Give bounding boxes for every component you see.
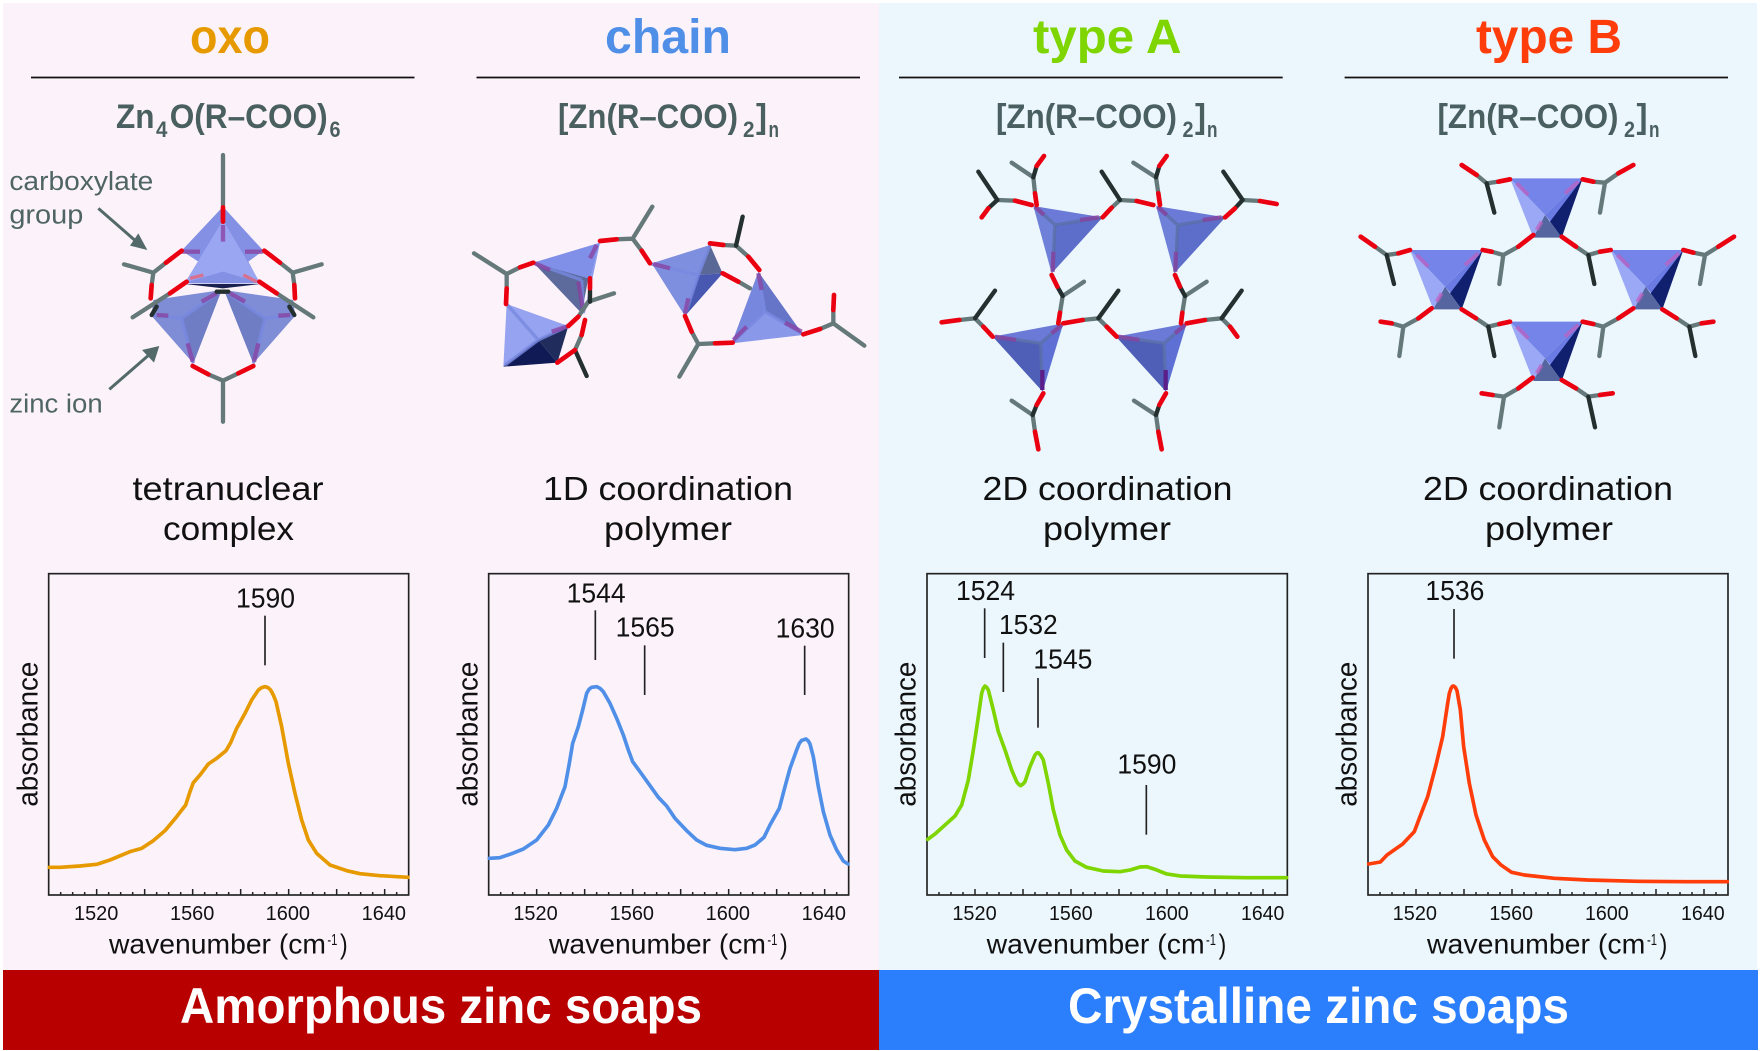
tetrahedra: top	[152, 207, 295, 363]
description: type A: polymer	[1043, 511, 1171, 548]
column: type A	[891, 11, 1287, 959]
formula: oxo: 6	[330, 117, 340, 142]
y axis title: absorbance	[453, 662, 485, 807]
formula: oxo: 4	[156, 117, 168, 142]
x axis numbers: 1520	[74, 902, 118, 925]
description: chain: polymer	[604, 511, 732, 548]
x axis title: )	[340, 928, 348, 959]
peak label 1524	[956, 575, 1015, 658]
molecule: tetranuclear complex with annotations	[9, 155, 322, 422]
description: type A: 2D coordination	[982, 471, 1232, 508]
x axis numbers: 1560	[610, 902, 654, 925]
description: chain: 1D coordination	[543, 471, 793, 508]
peak label 1532: 1532	[999, 609, 1058, 640]
molecule: 2D layer type B	[1361, 165, 1734, 427]
description: type B: 2D coordination	[1423, 471, 1673, 508]
background: crystalline panel	[879, 3, 1757, 970]
x axis title: wavenumber (cm	[108, 928, 326, 959]
peak label 1524: 1524	[956, 575, 1015, 606]
arrow: zinc ion	[109, 346, 159, 389]
curve	[1369, 686, 1727, 882]
peak label 1544: 1544	[567, 577, 626, 608]
x axis title: )	[1219, 928, 1226, 959]
callout: carboxylate group: carboxylate	[9, 166, 153, 196]
y axis title: absorbance	[13, 662, 45, 807]
heading: chain: chain	[605, 11, 731, 64]
peak label 1565	[616, 612, 675, 695]
x axis title: -1	[767, 932, 777, 949]
banner: amorphous zinc soaps	[3, 970, 879, 1050]
formula: oxo: Zn	[116, 98, 154, 136]
banner: crystalline zinc soaps	[879, 970, 1758, 1050]
x axis title: )	[1660, 928, 1667, 959]
x axis numbers: 1520	[513, 902, 558, 925]
peak label 1532	[999, 609, 1058, 692]
formula: type B: 2	[1624, 117, 1635, 142]
callout: carboxylate group	[9, 166, 153, 229]
x axis title: wavenumber (cm	[986, 928, 1205, 959]
peak label 1544	[567, 577, 626, 660]
tetrahedra	[1410, 178, 1683, 381]
description: type B	[1423, 471, 1673, 548]
formula: chain: n	[768, 117, 779, 142]
formula: chain: 2	[743, 117, 754, 142]
x axis numbers: 1520	[1393, 902, 1437, 925]
x axis title: )	[780, 928, 788, 959]
bonds	[1361, 165, 1734, 427]
description: oxo	[132, 471, 324, 548]
heading: oxo: oxo	[190, 11, 270, 64]
banner: amorphous zinc soaps: Amorphous zinc soaps	[180, 978, 702, 1034]
background: amorphous panel	[3, 3, 879, 970]
x axis numbers: 1640	[802, 902, 846, 925]
description: type B: polymer	[1485, 511, 1613, 548]
peak label 1630	[776, 613, 835, 695]
peak label 1536: 1536	[1425, 575, 1484, 606]
peak label 1630: 1630	[776, 613, 835, 644]
formula: oxo: O(R–COO)	[170, 98, 328, 136]
x axis numbers: 1600	[1585, 902, 1629, 925]
formula: type B: ]	[1636, 98, 1648, 136]
formula: type A: [Zn(R–COO)	[996, 98, 1177, 136]
callout: zinc ion: zinc ion	[9, 389, 103, 419]
peak label 1545	[1033, 644, 1092, 728]
bonds	[942, 156, 1277, 449]
x axis numbers: 1600	[1145, 902, 1189, 925]
formula: type A: ]	[1195, 98, 1206, 136]
curve	[489, 687, 848, 864]
x axis numbers: 1560	[170, 902, 214, 925]
spectrum: type B	[1332, 574, 1728, 959]
peak label 1590: 1590	[1117, 748, 1176, 779]
formula: type A: n	[1207, 117, 1218, 142]
spectrum: oxo	[13, 574, 409, 959]
x axis numbers: 1640	[362, 902, 406, 925]
x axis numbers: 1640	[1681, 902, 1725, 925]
x axis numbers: 1600	[266, 902, 310, 925]
molecule: 1D chain	[474, 207, 864, 377]
description: chain	[543, 471, 793, 548]
arrow: carboxylate group	[98, 208, 147, 250]
description: oxo: tetranuclear	[132, 471, 324, 508]
x axis numbers	[74, 902, 406, 925]
x axis numbers: 1560	[1489, 902, 1533, 925]
description: type A	[982, 471, 1232, 548]
tetrahedra	[503, 243, 803, 367]
tetrahedra	[993, 206, 1225, 392]
formula: chain: ]	[756, 98, 767, 136]
peak label 1545: 1545	[1033, 644, 1092, 675]
description: oxo: complex	[163, 511, 294, 548]
bonds	[474, 207, 864, 377]
curve	[49, 687, 408, 877]
callout: carboxylate group: group	[9, 199, 83, 229]
y axis title: absorbance	[891, 662, 923, 807]
peak label 1590: 1590	[236, 583, 295, 614]
heading: type B: type B	[1476, 11, 1622, 64]
formula: type A: 2	[1182, 117, 1194, 142]
peak label 1590	[236, 583, 295, 665]
formula: type B: n	[1649, 117, 1660, 142]
curve	[928, 686, 1287, 878]
x axis numbers	[513, 902, 846, 925]
molecule: 2D layer type A	[942, 156, 1277, 449]
formula: type B: [Zn(R–COO)	[1438, 98, 1618, 136]
spectrum: type A	[891, 574, 1287, 959]
peak label 1536	[1425, 575, 1484, 659]
x axis title: wavenumber (cm	[1426, 928, 1645, 959]
y axis title: absorbance	[1332, 662, 1364, 807]
x axis numbers: 1640	[1241, 902, 1284, 925]
bonds	[124, 155, 322, 422]
x axis numbers	[952, 902, 1284, 925]
peak label 1590	[1117, 748, 1176, 835]
x axis numbers: 1560	[1049, 902, 1093, 925]
x axis title: -1	[327, 932, 337, 949]
formula: chain: [Zn(R–COO)	[558, 98, 738, 136]
x axis numbers: 1520	[952, 902, 997, 925]
formula: oxo	[116, 98, 340, 142]
x axis numbers: 1600	[706, 902, 750, 925]
banner: crystalline zinc soaps: Crystalline zinc soaps	[1068, 978, 1569, 1034]
column: oxo	[9, 11, 414, 959]
x axis title: wavenumber (cm	[548, 928, 766, 959]
x axis numbers	[1393, 902, 1725, 925]
heading: type A: type A	[1033, 11, 1182, 64]
column: chain	[453, 11, 864, 959]
column: type B	[1332, 11, 1734, 959]
x axis title: -1	[1647, 932, 1657, 949]
x axis title: -1	[1206, 932, 1216, 949]
spectrum: chain	[453, 574, 849, 959]
peak label 1565: 1565	[616, 612, 675, 643]
